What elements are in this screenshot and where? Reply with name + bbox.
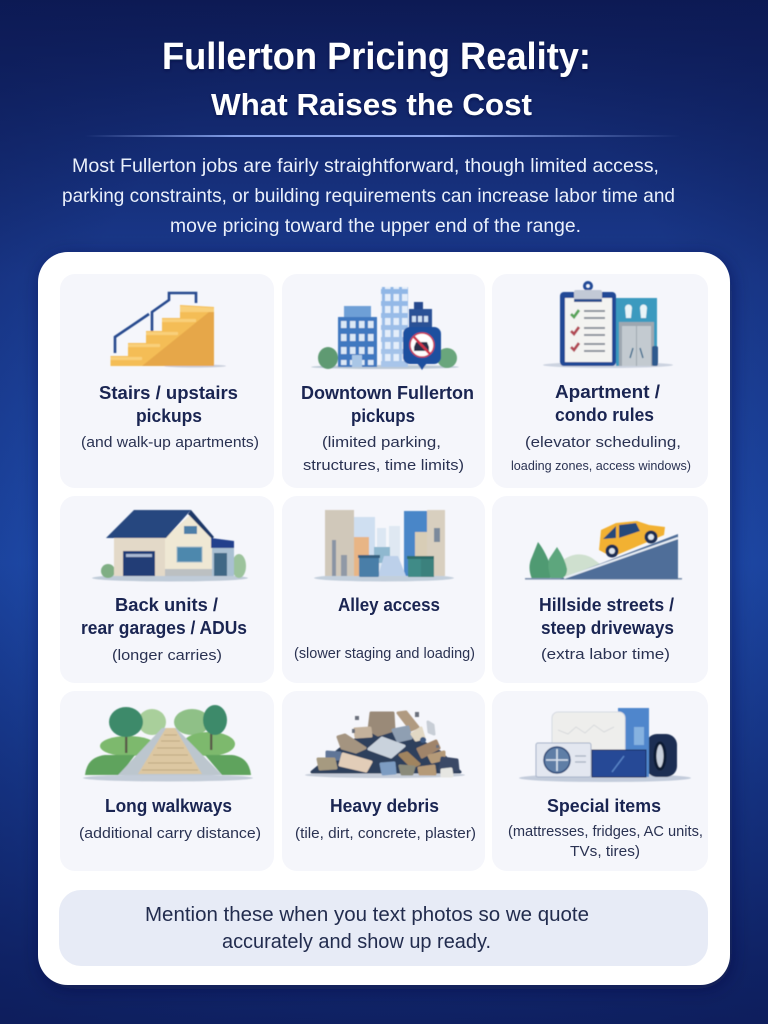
heading: steep driveways: [541, 618, 674, 638]
heading: rear garages / ADUs: [81, 618, 247, 638]
icon: car on steep hill: [525, 521, 682, 580]
callout bar: [59, 890, 708, 966]
title: [162, 36, 591, 122]
icon: stairs: [110, 293, 226, 368]
description: structures, time limits): [303, 457, 464, 474]
icon: mattress, appliance, AC unit, TV and tire: [519, 708, 691, 782]
heading: Stairs / upstairs: [99, 383, 238, 403]
description: (limited parking,: [322, 434, 441, 451]
tile: downtown: [282, 274, 485, 488]
heading: [99, 383, 238, 426]
callout bar: accurately and show up ready.: [222, 930, 491, 953]
heading: Heavy debris: [330, 796, 439, 816]
icon: house: [92, 510, 248, 582]
description: (extra labor time): [541, 646, 670, 663]
callout bar: Mention these when you text photos so we quote: [145, 903, 589, 926]
description: (longer carries): [112, 647, 222, 664]
description: (tile, dirt, concrete, plaster): [295, 825, 476, 842]
panel: white card: [38, 252, 730, 985]
description: TVs, tires): [570, 843, 640, 860]
title divider: [85, 135, 680, 137]
intro paragraph: [62, 155, 675, 237]
tile: back units: [60, 496, 274, 683]
heading: Downtown Fullerton: [301, 383, 474, 403]
heading: [301, 383, 474, 426]
description: loading zones, access windows): [511, 458, 691, 473]
icon: long walkway with trees: [83, 705, 253, 782]
heading: pickups: [136, 406, 202, 426]
description: (mattresses, fridges, AC units,: [508, 823, 703, 840]
icon: debris pile: [305, 712, 465, 778]
icon: city with no parking pin: [311, 287, 459, 370]
heading: Hillside streets /: [539, 595, 674, 615]
heading: condo rules: [555, 405, 654, 425]
intro paragraph: Most Fullerton jobs are fairly straightforward, though limited access,: [72, 155, 659, 177]
heading: Special items: [547, 796, 661, 816]
icon: clipboard and elevator: [543, 282, 673, 368]
tile: apartment rules: [492, 274, 708, 488]
description: (slower staging and loading): [294, 645, 475, 662]
heading: pickups: [351, 406, 415, 426]
description: (elevator scheduling,: [525, 434, 681, 451]
description: (additional carry distance): [79, 825, 261, 842]
heading: Back units /: [115, 595, 218, 615]
tile: alley: [282, 496, 485, 683]
intro paragraph: parking constraints, or building requirements can increase labor time and: [62, 185, 675, 207]
title: Fullerton Pricing Reality:: [162, 36, 591, 78]
description: (and walk-up apartments): [81, 434, 259, 451]
icon: alley with bins: [314, 510, 454, 582]
tile: heavy debris: [282, 691, 485, 871]
heading: [81, 595, 247, 638]
title: What Raises the Cost: [211, 87, 532, 122]
description: [303, 434, 464, 474]
tile: stairs: [60, 274, 274, 488]
heading: Long walkways: [105, 796, 232, 816]
heading: [555, 382, 660, 425]
heading: Apartment /: [555, 382, 660, 402]
tile: long walkways: [60, 691, 274, 871]
intro paragraph: move pricing toward the upper end of the range.: [170, 215, 581, 237]
description: [508, 823, 703, 860]
tile: special items: [492, 691, 708, 871]
description: [511, 434, 691, 473]
heading: Alley access: [338, 595, 440, 615]
tile: hillside: [492, 496, 708, 683]
heading: [539, 595, 674, 638]
